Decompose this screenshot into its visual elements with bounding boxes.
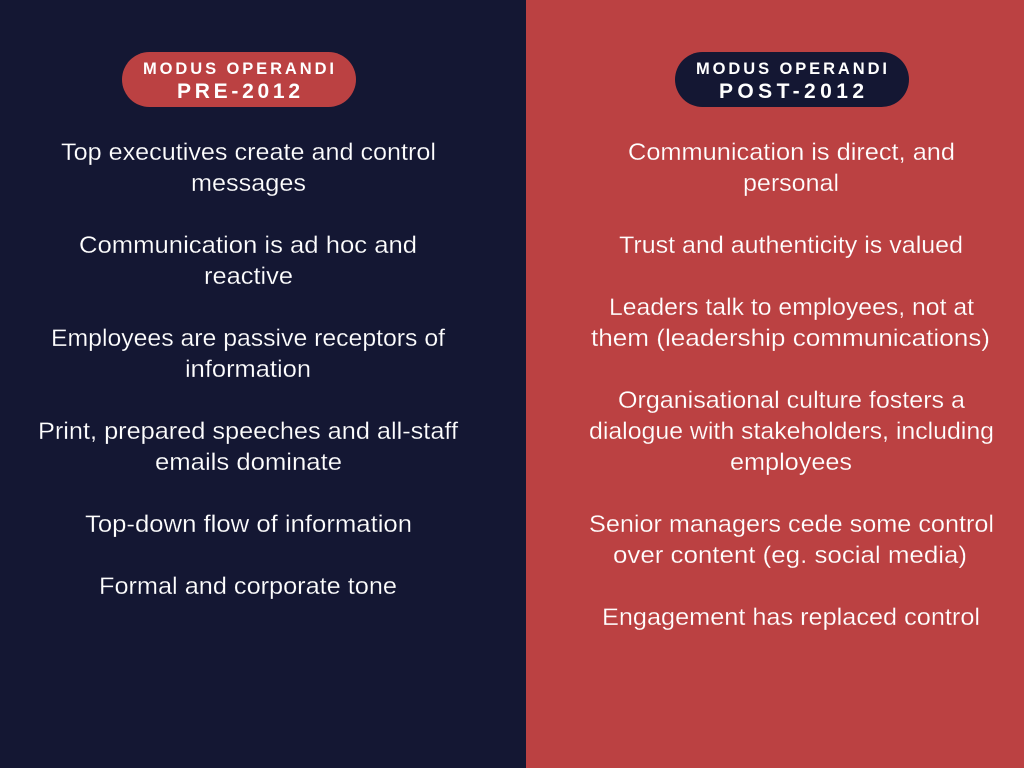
heading pill: modus operandi pre-2012: MODUS OPERANDI — [143, 60, 334, 78]
text block: trust and authenticity: Trust and authenticity is valued — [619, 232, 963, 259]
panel: pre-2012 — [0, 0, 526, 768]
text block: leaders talk: Leaders talk to employees, not at — [609, 294, 974, 321]
text block: print and speeches — [38, 418, 458, 476]
text block: print and speeches: Print, prepared speeches and all-staff — [38, 418, 458, 445]
text block: passive employees — [51, 325, 445, 383]
text block: organisational culture: dialogue with stakeholders, including — [589, 418, 994, 445]
text block: top executives — [61, 139, 436, 197]
heading pill: modus operandi post-2012: POST-2012 — [719, 80, 864, 103]
text block: ad hoc communication — [79, 232, 417, 290]
text block: direct communication — [628, 139, 955, 197]
text block: leaders talk — [591, 294, 990, 352]
text block: leaders talk: them (leadership communications) — [591, 325, 990, 352]
text block: direct communication: personal — [743, 170, 839, 197]
text block: top executives: Top executives create and control — [61, 139, 436, 166]
panel: post-2012 — [526, 0, 1024, 768]
text block: top-down flow: Top-down flow of information — [85, 511, 412, 538]
text block: print and speeches: emails dominate — [155, 449, 342, 476]
text block: engagement: Engagement has replaced control — [602, 604, 980, 631]
heading pill: modus operandi pre-2012: PRE-2012 — [177, 80, 300, 103]
text block: organisational culture: Organisational culture fosters a — [618, 387, 966, 414]
text block: ad hoc communication: reactive — [204, 263, 293, 290]
text block: senior managers — [589, 511, 994, 569]
text block: senior managers: over content (eg. social media) — [613, 542, 967, 569]
heading pill: modus operandi post-2012 — [675, 52, 909, 107]
text block: ad hoc communication: Communication is ad hoc and — [79, 232, 417, 259]
text block: direct communication: Communication is direct, and — [628, 139, 955, 166]
heading pill: modus operandi pre-2012 — [122, 52, 356, 107]
text block: top executives: messages — [191, 170, 306, 197]
text block: organisational culture — [589, 387, 994, 476]
heading pill: modus operandi post-2012: MODUS OPERANDI — [696, 60, 887, 78]
text block: formal tone: Formal and corporate tone — [99, 573, 397, 600]
text block: senior managers: Senior managers cede some control — [589, 511, 994, 538]
text block: passive employees: Employees are passive receptors of — [51, 325, 445, 352]
text block: passive employees: information — [185, 356, 311, 383]
text block: organisational culture: employees — [730, 449, 852, 476]
